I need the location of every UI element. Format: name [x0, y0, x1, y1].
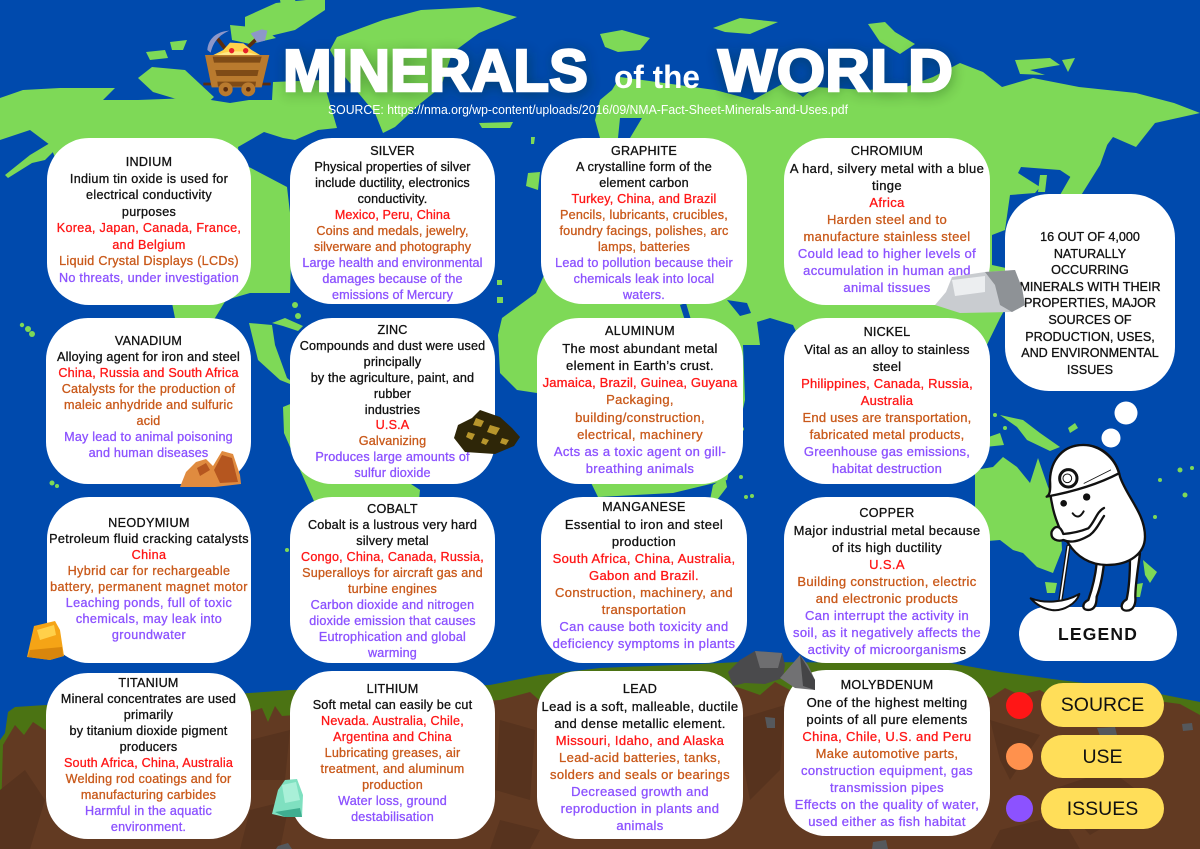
title: MINERALS: [284, 40, 590, 107]
issues: transmission pipes: [830, 780, 944, 794]
use: transportation: [602, 602, 686, 617]
use: Harden steel and to: [827, 212, 947, 226]
issues: Decreased growth and: [571, 784, 709, 798]
heading: ZINC: [378, 323, 407, 337]
source: China, Russia and South Africa: [58, 366, 239, 380]
panel: titanium: [46, 673, 251, 839]
description: element in Earth’s crust.: [566, 358, 714, 373]
heading: ALUMINUM: [605, 324, 675, 338]
use: Pencils, lubricants, crucibles,: [560, 208, 728, 222]
title: of the: [614, 59, 700, 95]
use: foundry facings, polishes, arc: [559, 224, 729, 238]
issues: May lead to animal poisoning: [64, 430, 233, 444]
panel: intro thought bubble: SOURCES OF: [1048, 313, 1132, 327]
panel: silver: [290, 138, 495, 304]
description: Lead is a soft, malleable, ductile: [542, 698, 738, 714]
issues: breathing animals: [586, 461, 694, 476]
use: Hybrid car for rechargeable: [68, 564, 230, 578]
description: [562, 341, 718, 373]
issues: [64, 430, 233, 460]
description: [537, 698, 743, 732]
description: tinge: [872, 178, 902, 192]
use: Liquid Crystal Displays (LCDs): [59, 254, 239, 268]
title: WORLD: [718, 40, 954, 107]
issues: Carbon dioxide and nitrogen: [311, 598, 474, 612]
panel: vanadium: [46, 318, 251, 484]
title: MINERALS: [283, 38, 588, 104]
panel: molybdenum: [784, 670, 990, 836]
description: Indium tin oxide is used for: [70, 172, 228, 186]
use: [555, 585, 733, 617]
source line: SOURCE: https://nma.org/wp-content/uploads/2016/09/NMA-Fact-Sheet-Minerals-and-Uses.pdf: [328, 103, 849, 117]
use: [803, 410, 971, 442]
use: Packaging,: [606, 392, 674, 407]
panel: aluminum: [537, 318, 743, 484]
heading: MOLYBDENUM: [841, 678, 933, 692]
description: Soft metal can easily be cut: [313, 698, 472, 712]
issues: Leaching ponds, full of toxic: [66, 596, 232, 610]
legend: use dot: [1006, 743, 1033, 770]
panel: intro thought bubble: MINERALS WITH THEIR: [1019, 280, 1161, 294]
description: [61, 692, 236, 754]
heading: NICKEL: [864, 324, 910, 338]
panel: graphite: [541, 138, 747, 304]
legend: source pill: SOURCE: [1061, 694, 1144, 716]
source: Nevada. Australia, Chile,: [321, 714, 464, 728]
issues: animal tissues: [843, 280, 931, 294]
source: [321, 714, 464, 744]
issues: and human diseases: [89, 446, 208, 460]
panel: chromium: [784, 138, 990, 305]
description: Alloying agent for iron and steel: [57, 350, 240, 364]
issues: [537, 782, 743, 834]
legend heading: [1019, 607, 1177, 661]
description: [70, 172, 228, 219]
description: include ductility, electronics: [315, 176, 470, 190]
issues: [793, 608, 981, 657]
use: manufacturing carbides: [81, 788, 216, 802]
legend: issues pill: ISSUES: [1067, 798, 1138, 820]
use: [804, 212, 970, 244]
source: South Africa, China, Australia,: [553, 551, 735, 566]
title: WORLD: [718, 38, 953, 104]
use: Galvanizing: [359, 434, 426, 448]
description: steel: [873, 359, 901, 374]
source: [553, 551, 735, 583]
description: of its high ductility: [832, 540, 942, 554]
source: U.S.A: [869, 556, 905, 572]
issues: damages because of the: [322, 272, 463, 286]
source: Korea, Japan, Canada, France,: [57, 221, 241, 235]
heading: GRAPHITE: [611, 144, 677, 158]
description: Cobalt is a lustrous very hard: [308, 518, 477, 532]
use: Lead-acid batteries, tanks,: [559, 750, 721, 764]
description: industries: [365, 403, 420, 417]
source: U.S.A: [376, 418, 409, 432]
issues: [338, 794, 447, 824]
panel: intro thought bubble: PROPERTIES, MAJOR: [1024, 296, 1156, 310]
issues: Water loss, ground: [338, 794, 447, 808]
heading: TITANIUM: [118, 676, 179, 690]
description: element carbon: [599, 176, 689, 190]
use: Lubricating greases, air: [325, 746, 460, 760]
description: production: [612, 534, 676, 549]
heading: COBALT: [367, 502, 418, 516]
issues: destabilisation: [351, 810, 434, 824]
source: Argentina and China: [333, 730, 452, 744]
description: producers: [120, 740, 177, 754]
use: maleic anhydride and sulfuric: [64, 398, 233, 412]
use: battery, permanent magnet motor: [50, 580, 248, 594]
issues: Acts as a toxic agent on gill-: [554, 444, 726, 459]
use: silverware and photography: [314, 240, 471, 254]
use: [66, 772, 232, 802]
source: Congo, China, Canada, Russia,: [301, 550, 484, 564]
use: [62, 382, 236, 428]
source: China: [132, 548, 166, 562]
issues: [555, 256, 733, 302]
legend: use pill: [1041, 735, 1164, 778]
issues: Large health and environmental: [302, 256, 483, 270]
source: Philippines, Canada, Russia,: [801, 376, 973, 391]
use: [575, 392, 705, 442]
description: silvery metal: [356, 534, 429, 548]
panel: zinc: [290, 318, 495, 484]
description: conductivity.: [358, 192, 427, 206]
description: Vital as an alloy to stainless: [804, 342, 970, 357]
use: manufacture stainless steel: [804, 228, 970, 244]
description: by the agriculture, paint, and: [311, 371, 474, 385]
description: [784, 694, 990, 728]
description: The most abundant metal: [562, 341, 718, 356]
panel: copper: [784, 497, 990, 663]
issues: construction equipment, gas: [801, 762, 973, 778]
source: Missouri, Idaho, and Alaska: [556, 732, 724, 748]
issues: Harmful in the aquatic: [85, 804, 212, 818]
use: [797, 574, 977, 606]
issues: Can cause both toxicity and: [559, 619, 729, 634]
source: Gabon and Brazil.: [589, 568, 699, 583]
issues: Eutrophication and global: [319, 630, 466, 644]
panel: intro thought bubble: PRODUCTION, USES,: [1025, 330, 1155, 344]
issues: soil, as it negatively affects the: [793, 624, 981, 640]
use: End uses are transportation,: [803, 410, 971, 425]
use: lamps, batteries: [598, 240, 690, 254]
issues: groundwater: [112, 628, 186, 642]
panel: manganese: [541, 497, 747, 663]
description: by titanium dioxide pigment: [69, 724, 228, 738]
panel: lead: [537, 671, 743, 839]
heading: LITHIUM: [367, 682, 418, 696]
issues: Can interrupt the activity in: [805, 608, 969, 622]
source: Africa: [869, 194, 905, 210]
panel: intro thought bubble: AND ENVIRONMENTAL: [1021, 346, 1159, 360]
description: Compounds and dust were used: [300, 339, 485, 353]
issues: deficiency symptoms in plants: [553, 636, 735, 651]
description: One of the highest melting: [807, 694, 967, 710]
description: purposes: [122, 204, 176, 218]
issues: [784, 762, 990, 830]
panel: intro thought bubble: NATURALLY: [1054, 247, 1126, 261]
description: [790, 160, 984, 193]
description: electrical conductivity: [86, 188, 212, 202]
use: turbine engines: [348, 582, 437, 596]
legend: source dot: [1006, 692, 1033, 719]
source: Jamaica, Brazil, Guinea, Guyana: [543, 375, 737, 390]
source: [801, 376, 973, 408]
issues: Could lead to higher levels of: [798, 246, 976, 260]
legend: use pill: USE: [1082, 746, 1123, 768]
issues: activity of microorganisms: [808, 642, 966, 656]
source: [57, 221, 241, 252]
description: Physical properties of silver: [314, 160, 471, 174]
use: treatment, and aluminum: [321, 762, 464, 776]
issues: animals: [616, 818, 664, 832]
issues: Effects on the quality of water,: [795, 796, 979, 812]
use: electrical, machinery: [577, 427, 703, 442]
issues: dioxide emission that causes: [309, 614, 476, 628]
legend: issues pill: [1041, 788, 1164, 829]
issues: Lead to pollution because their: [555, 256, 733, 270]
use: solders and seals or bearings: [550, 766, 730, 782]
panel: lithium: [290, 671, 495, 839]
issues: emissions of Mercury: [332, 288, 453, 302]
description: [576, 160, 712, 190]
description: [308, 518, 477, 548]
use: [302, 566, 483, 596]
panel: indium: [47, 138, 251, 305]
issues: [302, 256, 483, 302]
description: [804, 342, 970, 374]
description: rubber: [374, 387, 411, 401]
use: Building construction, electric: [797, 574, 977, 588]
description: [794, 522, 980, 555]
use: Construction, machinery, and: [555, 585, 733, 600]
heading: NEODYMIUM: [108, 516, 190, 530]
description: Mineral concentrates are used: [61, 692, 236, 706]
issues: Produces large amounts of: [315, 450, 470, 464]
issues: warming: [368, 646, 417, 660]
heading: SILVER: [370, 144, 415, 158]
use: Coins and medals, jewelry,: [316, 224, 469, 238]
issues: [554, 444, 726, 476]
panel: intro thought bubble: [1005, 194, 1175, 391]
description: Essential to iron and steel: [565, 517, 723, 532]
issues: sulfur dioxide: [354, 466, 431, 480]
issues: [66, 596, 232, 642]
heading: LEAD: [623, 682, 657, 696]
use: fabricated metal products,: [810, 427, 964, 442]
issues: [85, 804, 212, 834]
description: Major industrial metal because: [794, 522, 980, 538]
heading: VANADIUM: [115, 334, 182, 348]
source: Australia: [861, 393, 913, 408]
description: principally: [364, 355, 421, 369]
issues: reproduction in plants and: [561, 800, 719, 816]
heading: INDIUM: [126, 155, 172, 169]
source: South Africa, China, Australia: [64, 756, 233, 770]
description: [300, 339, 485, 417]
use: acid: [137, 414, 160, 428]
issues: chemicals, may leak into: [76, 612, 222, 626]
legend: source pill: [1041, 683, 1164, 727]
description: points of all pure elements: [806, 712, 968, 726]
description: A hard, silvery metal with a blue: [790, 160, 984, 176]
issues: No threats, under investigation: [59, 270, 239, 284]
panel: nickel: [784, 318, 990, 484]
panel: intro thought bubble: OCCURRING: [1051, 263, 1129, 277]
panel: intro thought bubble: 16 OUT OF 4,000: [1040, 230, 1140, 244]
use: Make automotive parts,: [816, 746, 958, 760]
use: [50, 564, 248, 594]
use: [320, 746, 464, 792]
issues: [553, 619, 735, 651]
heading: MANGANESE: [602, 500, 686, 514]
use: Catalysts for the production of: [62, 382, 235, 396]
issues: habitat destruction: [832, 461, 942, 476]
heading: COPPER: [859, 506, 915, 520]
issues: [309, 598, 476, 660]
issues: environment.: [111, 820, 186, 834]
description: [314, 160, 471, 206]
description: and dense metallic element.: [554, 716, 726, 730]
issues: used either as fish habitat: [808, 814, 966, 828]
source: and Belgium: [112, 238, 186, 252]
issues: accumulation in human and: [803, 262, 971, 278]
use: and electronic products: [816, 590, 958, 606]
issues: [315, 450, 470, 480]
description: A crystalline form of the: [576, 160, 712, 174]
use: production: [362, 778, 423, 792]
issues: chemicals leak into local: [574, 272, 714, 286]
panel: cobalt: [290, 497, 495, 663]
source: Mexico, Peru, China: [335, 208, 450, 222]
legend: issues dot: [1006, 795, 1033, 822]
panel: intro thought bubble: ISSUES: [1067, 363, 1113, 377]
legend heading: LEGEND: [1058, 624, 1138, 644]
use: building/construction,: [575, 410, 705, 425]
use: Superalloys for aircraft gas and: [302, 566, 483, 580]
description: Petroleum fluid cracking catalysts: [49, 532, 249, 546]
use: [537, 748, 743, 782]
use: Welding rod coatings and for: [66, 772, 231, 786]
issues: Greenhouse gas emissions,: [804, 444, 970, 459]
issues: [804, 444, 970, 476]
description: [565, 517, 723, 549]
heading: CHROMIUM: [851, 144, 923, 158]
description: primarily: [124, 708, 173, 722]
issues: [798, 246, 976, 294]
source: China, Chile, U.S. and Peru: [802, 728, 972, 744]
source: Turkey, China, and Brazil: [572, 192, 716, 206]
issues: waters.: [623, 288, 665, 302]
panel: neodymium: [47, 497, 251, 663]
use: [559, 208, 729, 254]
use: [314, 224, 472, 254]
